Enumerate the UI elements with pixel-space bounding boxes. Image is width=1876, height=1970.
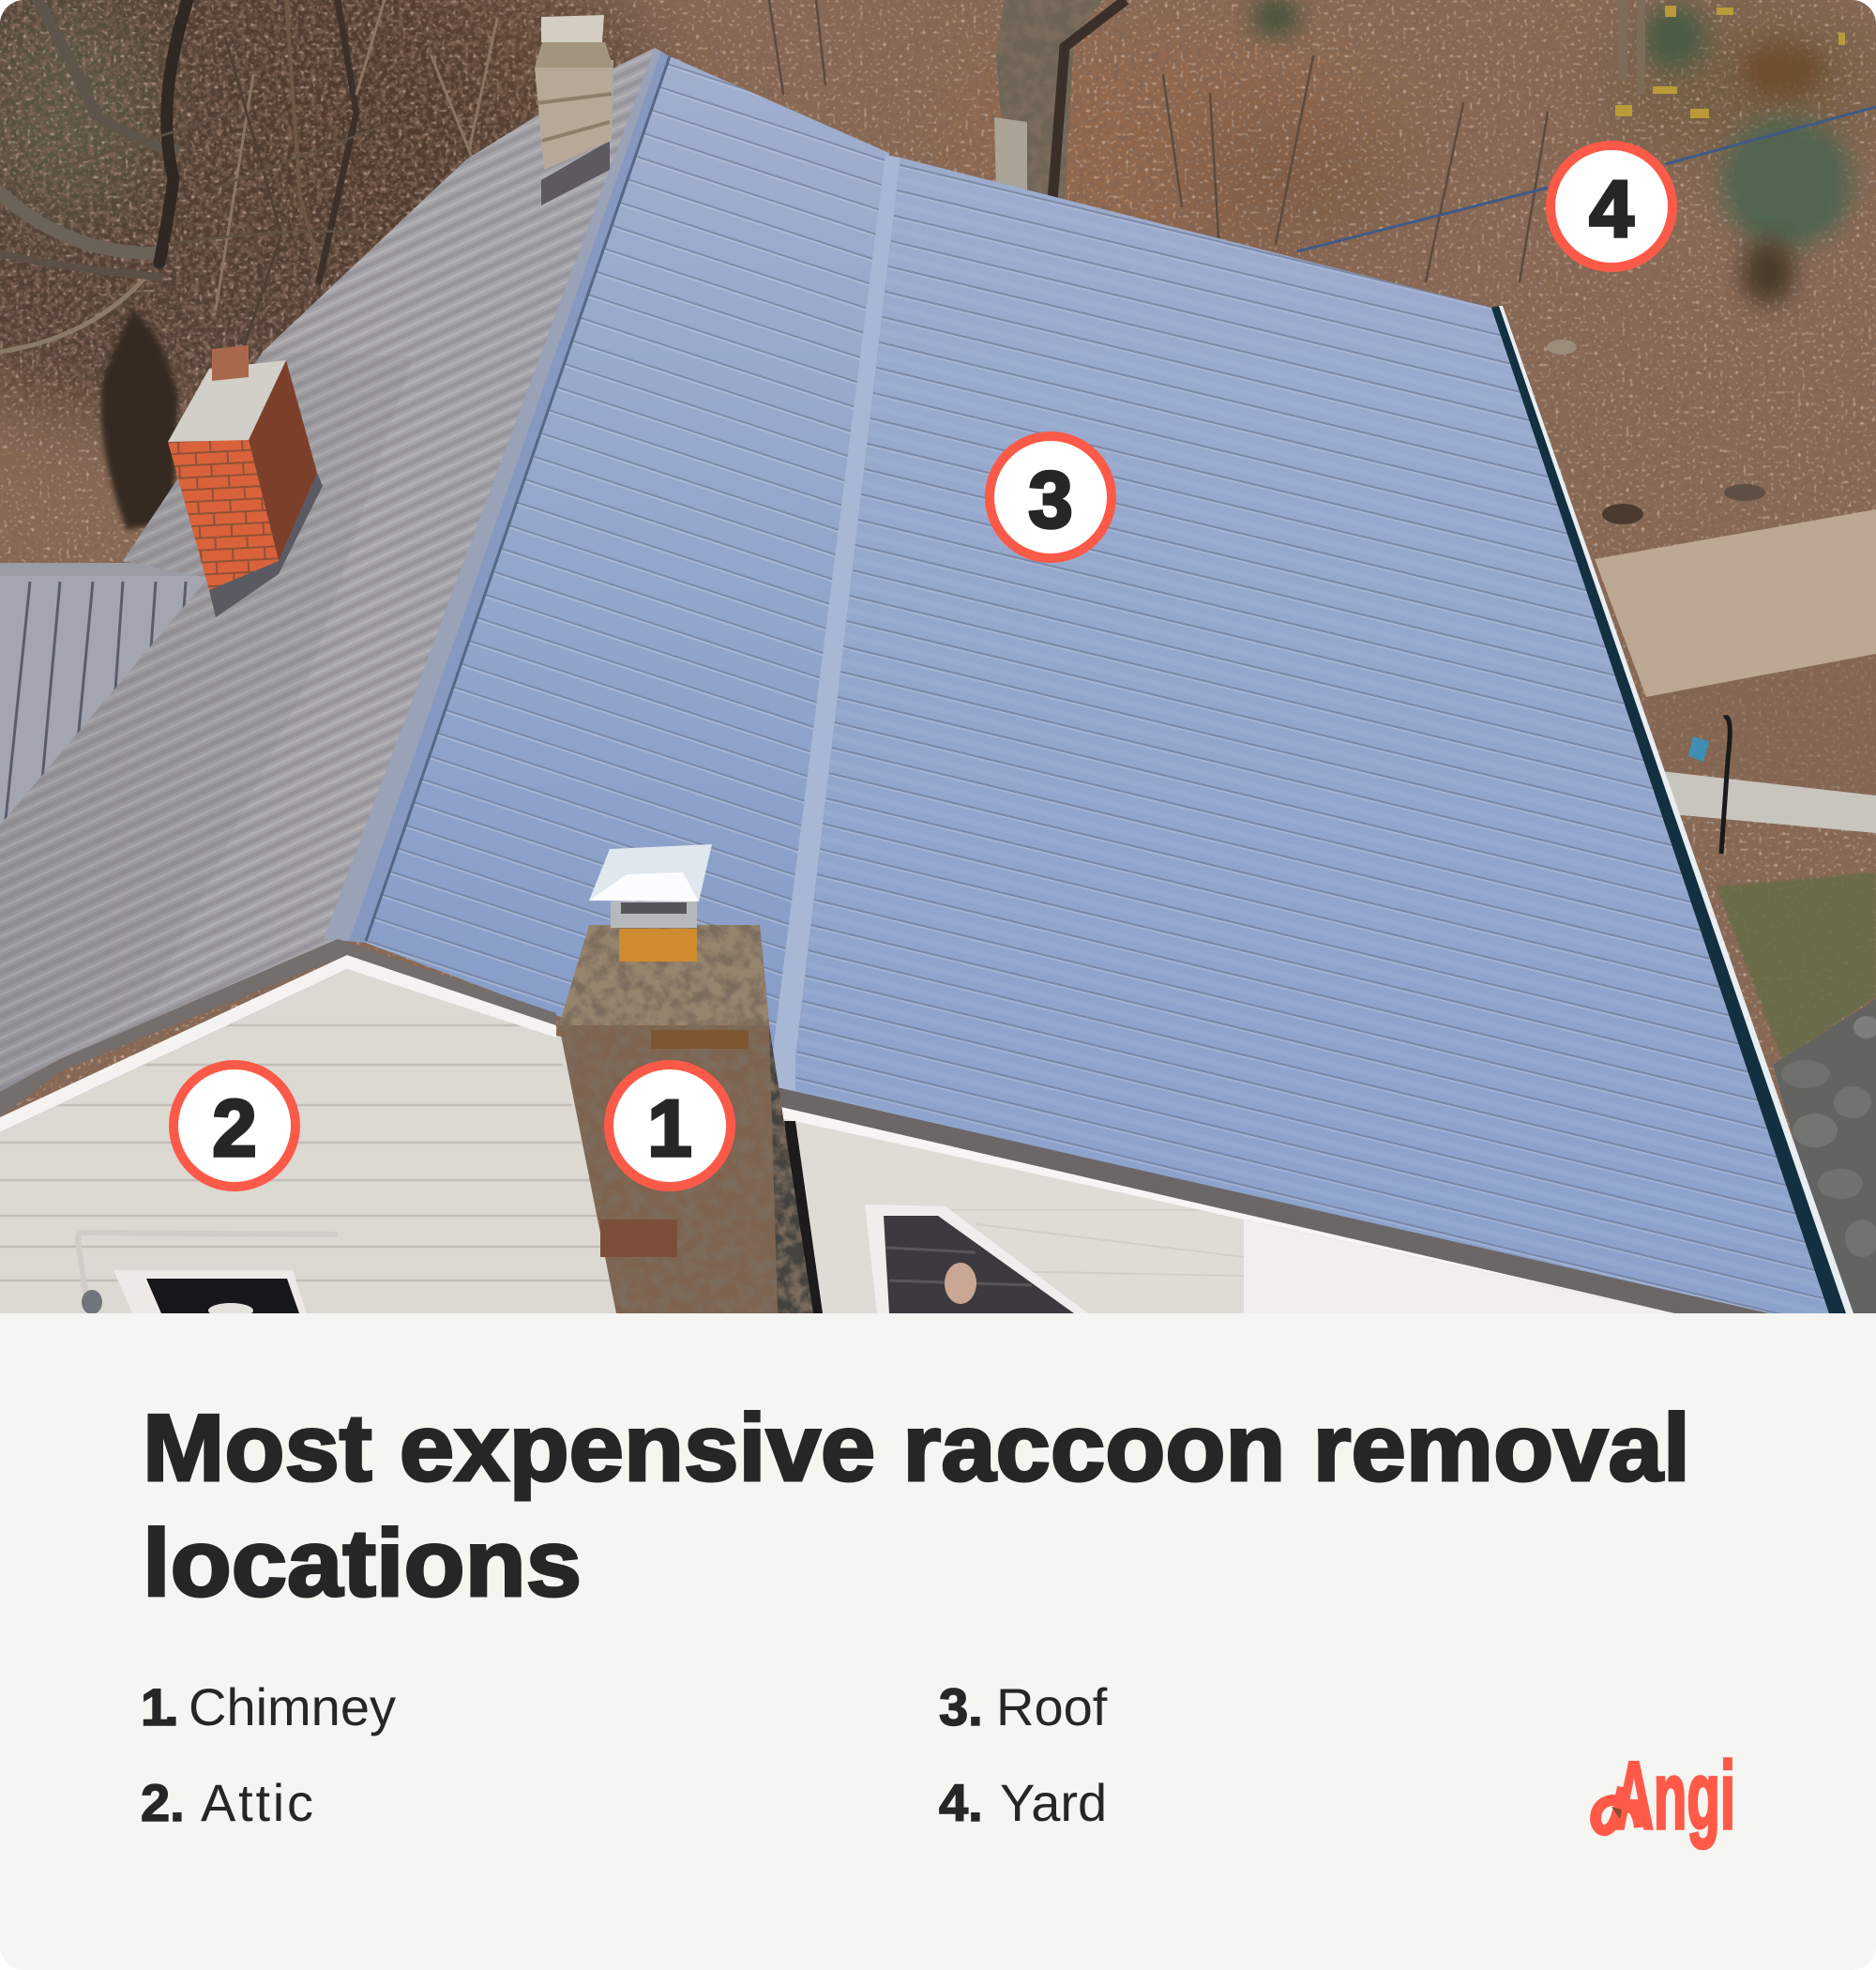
chimney flue — [619, 929, 697, 962]
bare tree branches, top left — [0, 0, 1548, 530]
Angi logo: Angi — [1614, 1742, 1735, 1849]
window and conduit on left wall — [78, 1233, 338, 1318]
blue left panel of roof — [366, 56, 889, 1098]
yard post with blue tag — [1688, 718, 1730, 854]
green shrub and yellow foliage, top right — [1251, 0, 1853, 305]
marker 4: yard: 4 — [1589, 165, 1634, 254]
list item 2: 2. — [141, 1773, 185, 1832]
blue wire — [1297, 107, 1876, 251]
list item 1: Chimney — [189, 1677, 396, 1736]
pale stone chimney, top — [535, 15, 613, 205]
stone chimney with cap — [559, 844, 823, 1313]
right wall with window — [773, 1086, 1769, 1323]
forest floor background — [0, 0, 1876, 1313]
ridge cap band — [324, 48, 670, 943]
annex roof, far left — [0, 563, 208, 826]
red brick chimney — [168, 345, 323, 617]
left gable wall with siding — [0, 969, 619, 1313]
marker 4: yard — [1551, 145, 1672, 267]
title — [143, 1396, 1690, 1616]
list item 4: 4. — [939, 1773, 983, 1832]
chimney mesh — [611, 902, 697, 928]
marker 2: attic: 2 — [212, 1084, 257, 1174]
grass patch — [1717, 872, 1876, 1060]
grey left roof slope — [0, 48, 655, 1092]
list item 2: Attic — [201, 1773, 313, 1832]
title: locations — [143, 1511, 582, 1616]
left gable trim — [0, 939, 556, 1132]
concrete driveway — [1595, 509, 1876, 697]
chimney metal cap — [589, 844, 712, 902]
list item 3: Roof — [996, 1677, 1108, 1736]
list item 4: Yard — [1000, 1773, 1107, 1832]
marker 1: chimney: 1 — [647, 1084, 692, 1174]
large tree trunk, top centre — [985, 0, 1126, 206]
list item 3: 3. — [939, 1677, 983, 1736]
marker 1: chimney — [609, 1065, 731, 1187]
title: Most expensive raccoon removal — [143, 1396, 1690, 1501]
central roof seam band — [772, 155, 900, 1098]
list item 1: 1. — [141, 1677, 175, 1736]
rocks in yard — [1547, 340, 1765, 524]
gutter — [1491, 306, 1853, 1313]
photo of house roof from above — [0, 0, 1876, 1323]
stone curb — [1660, 771, 1876, 833]
Angi logo — [1596, 1742, 1735, 1849]
marker 2: attic — [174, 1065, 295, 1187]
marker 3: roof: 3 — [1028, 456, 1073, 545]
blue right panel of roof — [795, 158, 1829, 1321]
cobblestone path — [1773, 999, 1876, 1313]
marker 3: roof — [990, 436, 1112, 558]
leaf bed near curb — [1646, 654, 1876, 797]
